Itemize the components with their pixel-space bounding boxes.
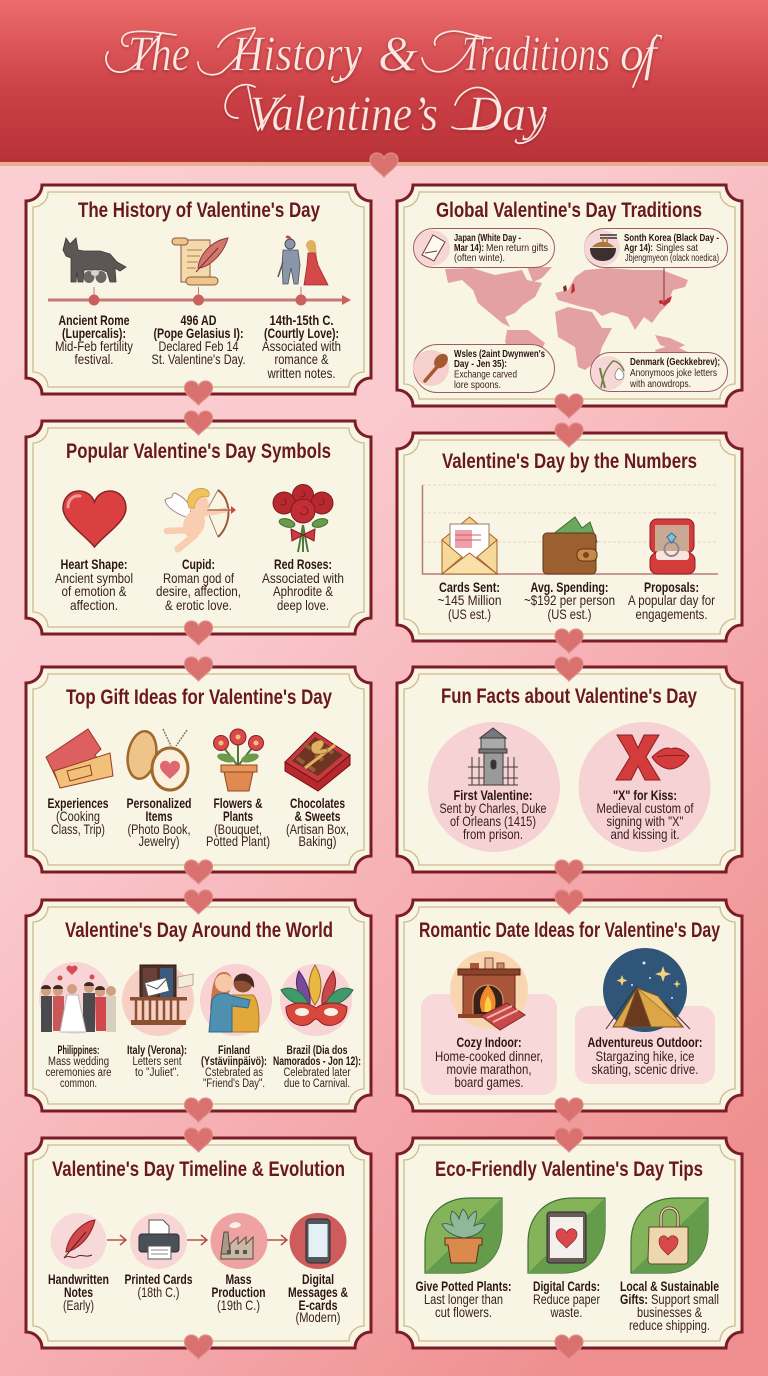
text: Philippines: common. [60, 1078, 97, 1090]
heading: Valentine's Day by the Numbers [442, 449, 697, 473]
chart axes [422, 485, 718, 574]
text: Potted Plants: Give Potted Plants: [416, 1278, 512, 1294]
icon: Verona balcony [122, 964, 194, 1036]
callout: South Korea: Sonth Korea (Black Day - [624, 232, 719, 244]
text: Heart Shape [55, 556, 133, 613]
panel: Symbols [26, 421, 371, 634]
text: Digital Messages: Messages & [288, 1284, 348, 1300]
text: 496 AD: Declared Feb 14 [158, 338, 239, 354]
icon: locket [124, 729, 188, 790]
icon: ring box [650, 519, 695, 574]
text: Courtly Love [262, 312, 341, 381]
text: First Valentine [440, 787, 547, 842]
cozy indoor card [421, 994, 557, 1095]
text: Mass Production: Production [212, 1284, 266, 1300]
text: Potted Plants: Last longer than [424, 1291, 503, 1307]
callout: South Korea: Singles sat [656, 242, 698, 254]
text: Flowers and Plants: (Bouquet, [214, 821, 262, 837]
callout: Japan [414, 228, 554, 268]
arrow [107, 1235, 126, 1245]
text: Courtly Love: (Courtly Love): [264, 325, 339, 341]
text: Experiences [48, 795, 109, 837]
text: 496 AD [152, 312, 246, 367]
panel: Fun Facts [397, 667, 742, 872]
text: Handwritten Notes: Notes [64, 1284, 93, 1300]
text: Experiences: Class, Trip) [51, 821, 105, 837]
text: Chocolates and Sweets: & Sweets [294, 808, 341, 824]
icon: scroll and quill [172, 238, 228, 285]
text: Avg. Spending: ~$192 per person [524, 592, 615, 608]
text: Avg. Spending: (US est.) [548, 606, 592, 622]
text: Mass Production: Mass [226, 1271, 252, 1287]
icon: flower pot [214, 729, 264, 791]
icon: chocolate box [285, 732, 350, 791]
title: The [128, 25, 190, 81]
text: Local and Sustainable: businesses & [637, 1304, 703, 1320]
text: X for Kiss: signing with "X" [606, 813, 684, 829]
arrow [187, 1235, 207, 1245]
icon: wallet [543, 517, 597, 574]
icon: cupid [165, 488, 236, 549]
icon: Japan gift [414, 230, 450, 266]
callout: Wales: Exchange carved [454, 368, 517, 380]
text: Personalized Items [126, 795, 192, 849]
panel: The History of Valentine's Day [26, 185, 371, 394]
text: Digital Cards [533, 1278, 600, 1320]
text: Digital Messages: (Modern) [296, 1309, 340, 1325]
text: Cupid: desire, affection, [156, 583, 241, 599]
callout: Japan: Mar 14): [454, 242, 484, 254]
text: Mass Production [212, 1271, 266, 1313]
title: & [378, 25, 418, 81]
text: Local and Sustainable: Local & Sustainable [620, 1278, 719, 1294]
heading: Valentine's Day Around the World [65, 918, 333, 942]
icon: leaf with tote bag [631, 1198, 708, 1273]
text: Printed Cards: Printed Cards [124, 1271, 193, 1287]
text: Finland: "Friend's Day". [203, 1078, 265, 1090]
text: First Valentine: of Orleans (1415) [450, 813, 536, 829]
icon: heart [63, 491, 126, 547]
panel: Eco-Friendly Tips [397, 1138, 742, 1348]
text: Cozy Indoor: board games. [454, 1074, 524, 1090]
text: Adventurous Outdoor: skating, scenic drive. [592, 1061, 698, 1077]
heading: Fun Facts about Valentine's Day [441, 684, 697, 708]
text: Heart Shape: of emotion & [62, 583, 127, 599]
header banner [0, 0, 768, 166]
icon: factory [210, 1213, 268, 1269]
text: Digital Messages: Digital [302, 1271, 334, 1287]
text: Personalized Items: Personalized [126, 795, 192, 811]
text: Proposals [628, 579, 715, 622]
callout: Denmark: Anonymoos joke letters [630, 367, 717, 379]
text: First Valentine: Sent by Charles, Duke [440, 800, 547, 816]
heading: Top Gift Ideas for Valentine's Day [66, 685, 332, 709]
text: Printed Cards: (18th C.) [138, 1284, 180, 1300]
text: Handwritten Notes: Handwritten [48, 1271, 109, 1287]
callout: Denmark: with anowdrops. [629, 378, 691, 390]
text: Handwritten Notes: (Early) [63, 1297, 94, 1313]
text: Ancient Rome: Mid-Feb fertility [55, 338, 133, 354]
text: Cupid: & erotic love. [165, 597, 232, 613]
text: Adventurous Outdoor: Adventureus Outdoor: [588, 1034, 702, 1050]
text: Finland: Cstebrated as [205, 1067, 263, 1079]
world map [445, 267, 690, 385]
text: Flowers and Plants: Flowers & [214, 795, 262, 811]
icon: smartphone [290, 1213, 346, 1269]
heading: Popular Valentine's Day Symbols [66, 439, 331, 463]
text: Local and Sustainable: reduce shipping. [629, 1317, 710, 1333]
text: Brazil: Celebrated later [284, 1067, 351, 1079]
text: Courtly Love: Associated with [262, 338, 341, 354]
text: Avg. Spending [524, 579, 615, 622]
text: Mass Production: (19th C.) [217, 1297, 260, 1313]
text: X for Kiss: and kissing it. [610, 826, 680, 842]
text: 496 AD: (Pope Gelasius I): [154, 325, 244, 341]
text: Cupid: Roman god of [163, 570, 234, 586]
fact circles [428, 722, 710, 852]
text: Cozy Indoor [435, 1034, 543, 1090]
text: Finland: (Ystäviinpäivö): [201, 1056, 267, 1068]
callout: Japan: Japan (White Day - [454, 232, 521, 244]
callout: South Korea: Jbjengmyeon (olack noedica) [625, 252, 719, 264]
text: Brazil: Brazil (Dia dos [286, 1045, 348, 1057]
text: Flowers and Plants [206, 795, 270, 849]
text: Brazil: due to Carnival. [284, 1078, 350, 1090]
text: Local and Sustainable [620, 1278, 719, 1333]
text: Digital Messages [288, 1271, 348, 1325]
text: Ancient Rome [55, 312, 133, 367]
text: Experiences: (Cooking [56, 808, 100, 824]
text: Italy [127, 1045, 187, 1079]
text: Personalized Items: Items [146, 808, 173, 824]
icon: noodle bowl [584, 230, 620, 266]
text: Flowers and Plants: Plants [223, 808, 253, 824]
text: Potted Plants [416, 1278, 512, 1320]
panel: Top Gift Ideas [26, 667, 371, 872]
icon: header heart [370, 153, 398, 177]
text: First Valentine: First Valentine: [454, 787, 532, 803]
text: Red Roses: Red Roses: [274, 556, 332, 572]
text: Finland [201, 1045, 267, 1090]
text: Cozy Indoor: Cozy Indoor: [456, 1034, 522, 1050]
callout: Wales: Day - Jen 35): [454, 358, 507, 370]
text: Red Roses: Associated with [262, 570, 344, 586]
text: Flowers and Plants: Potted Plant) [206, 833, 270, 849]
callout: Japan: Men return gifts [486, 242, 548, 254]
text: Proposals: Proposals: [644, 579, 699, 595]
text: Cupid [156, 556, 241, 613]
text: Courtly Love: 14th-15th C. [270, 312, 334, 328]
text: Philippines [46, 1045, 112, 1090]
callout: South Korea [584, 228, 728, 268]
text: Digital Cards: waste. [550, 1304, 582, 1320]
text: Heart Shape: Heart Shape: [60, 556, 128, 572]
text: Italy: Italy (Verona): [127, 1045, 187, 1057]
text: Ancient Rome: Ancient Rome [58, 312, 130, 328]
icon: quill [50, 1213, 106, 1269]
heading: Global Valentine's Day Traditions [436, 198, 702, 222]
icon: love spoon [413, 350, 451, 386]
icon: carnival mask [280, 964, 353, 1036]
text: 496 AD: St. Valentine's Day. [152, 351, 246, 367]
icon: red roses [273, 484, 333, 552]
title: of [620, 25, 663, 81]
text: Red Roses: deep love. [277, 597, 329, 613]
text: Chocolates and Sweets: Chocolates [290, 795, 345, 811]
text: Red Roses: Aphrodite & [273, 583, 334, 599]
text: Philippines: Philippines: [58, 1045, 100, 1057]
text: Cupid: Cupid: [182, 556, 215, 572]
icon: snowdrop [591, 356, 625, 390]
text: Ancient Rome: festival. [74, 351, 114, 367]
callout: Japan: (often winte). [454, 252, 505, 264]
text: X for Kiss: "X" for Kiss: [613, 787, 677, 803]
text: First Valentine: from prison. [463, 826, 523, 842]
text: Handwritten Notes [48, 1271, 109, 1313]
text: Ancient Rome: (Lupercalis): [62, 325, 126, 341]
panel: Global Traditions [397, 185, 742, 406]
callout: Denmark [590, 352, 728, 392]
icon: mass wedding [39, 962, 116, 1034]
text: Personalized Items: Jewelry) [138, 833, 180, 849]
title: Day [467, 85, 548, 141]
text: Local and Sustainable: Support small [651, 1291, 719, 1307]
text: Cozy Indoor: Home-cooked dinner, [435, 1048, 543, 1064]
text: Chocolates and Sweets: Baking) [298, 833, 336, 849]
icon: leaf with potted plant [425, 1198, 502, 1273]
text: Adventurous Outdoor [588, 1034, 702, 1077]
panel: By the Numbers [397, 433, 742, 641]
heading: The History of Valentine's Day [78, 198, 320, 222]
text: Finland: Finland [218, 1045, 250, 1057]
text: Cards Sent: Cards Sent: [439, 579, 500, 595]
text: Printed Cards [124, 1271, 193, 1300]
icon: she-wolf [63, 238, 126, 283]
text: Heart Shape: affection. [70, 597, 118, 613]
text: Philippines: Mass wedding [48, 1056, 109, 1068]
panel: Romantic Date Ideas [397, 900, 742, 1111]
text: Proposals: engagements. [636, 606, 708, 622]
text: Red Roses [262, 556, 344, 613]
callout: Wales: Wsles (2aint Dwynwen's [454, 348, 545, 360]
panel: Around the World [26, 900, 371, 1111]
text: Brazil: Namorados - Jon 12): [273, 1056, 361, 1068]
panel: Timeline and Evolution [26, 1138, 371, 1348]
text: Digital Cards: Reduce paper [533, 1291, 600, 1307]
text: Cards Sent: (US est.) [448, 606, 491, 622]
heading: Valentine's Day Timeline & Evolution [52, 1157, 345, 1181]
text: Avg. Spending: Avg. Spending: [530, 579, 608, 595]
icon: prison tower [468, 728, 518, 785]
icon: envelope [442, 517, 497, 574]
text: Potted Plants: cut flowers. [435, 1304, 492, 1320]
icon: friends hugging [200, 964, 272, 1036]
text: Heart Shape: Ancient symbol [55, 570, 133, 586]
title [106, 25, 663, 143]
arrow [267, 1235, 287, 1245]
timeline axis [48, 287, 351, 306]
icon: X and kiss [616, 735, 689, 780]
icon: leaf with tablet [528, 1198, 605, 1273]
icon: fireplace and blanket [450, 951, 528, 1030]
callout: South Korea: Agr 14): [624, 242, 653, 254]
text: Philippines: ceremonies are [46, 1067, 112, 1079]
text: 496 AD: 496 AD [180, 312, 216, 328]
callout: Wales [413, 344, 554, 392]
text: Cards Sent [438, 579, 502, 622]
text: X for Kiss [596, 787, 694, 842]
icon: tickets [46, 729, 113, 788]
text: Local and Sustainable: Gifts: [620, 1291, 648, 1307]
callout: Denmark: Denmark (Geckkebrev); [630, 356, 720, 368]
text: Proposals: A popular day for [628, 592, 715, 608]
adventurous outdoor card [575, 1006, 715, 1084]
connector hearts [184, 381, 583, 1359]
text: Courtly Love: romance & [274, 351, 329, 367]
text: Personalized Items: (Photo Book, [128, 821, 190, 837]
text: Adventurous Outdoor: Stargazing hike, ice [596, 1048, 695, 1064]
text: Digital Messages: E-cards [298, 1297, 338, 1313]
heading: Eco-Friendly Valentine's Day Tips [435, 1157, 703, 1181]
text: Digital Cards: Digital Cards: [533, 1278, 600, 1294]
text: Cozy Indoor: movie marathon, [446, 1061, 532, 1077]
callout: Wales: lore spoons. [454, 379, 501, 391]
icon: knight and lady [278, 235, 328, 285]
icon: tent under stars [603, 948, 690, 1032]
text: Cards Sent: ~145 Million [438, 592, 502, 608]
text: X for Kiss: Medieval custom of [596, 800, 694, 816]
text: Chocolates and Sweets [286, 795, 349, 849]
text: Experiences: Experiences [48, 795, 109, 811]
text: Chocolates and Sweets: (Artisan Box, [286, 821, 349, 837]
text: Brazil [273, 1045, 361, 1090]
icon: printer [130, 1213, 187, 1269]
title: Traditions [462, 25, 610, 81]
title: Valentine’s [250, 85, 438, 141]
title: History [231, 25, 363, 81]
text: Italy: Letters sent [132, 1056, 182, 1068]
text: Italy: to "Juliet". [135, 1067, 179, 1079]
text: Courtly Love: written notes. [267, 365, 336, 381]
map markers [563, 267, 672, 306]
